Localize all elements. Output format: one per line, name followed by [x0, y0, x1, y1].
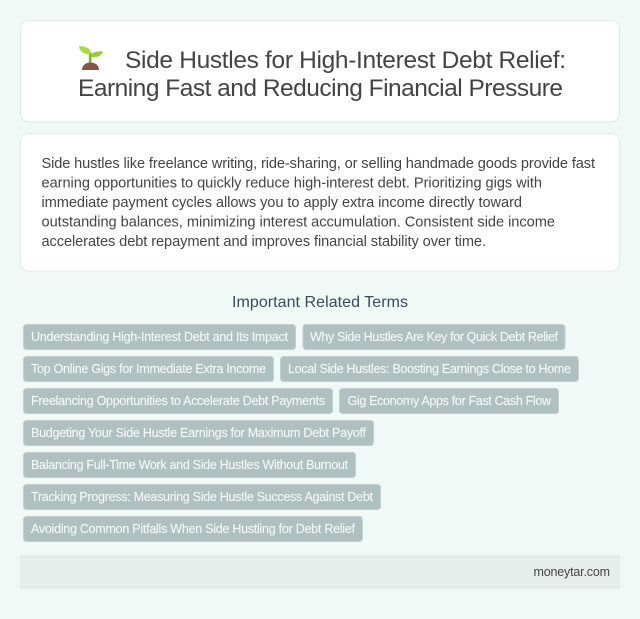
text block: description paragraph: accelerates debt repayment and improves financial stability over time.: [42, 234, 486, 250]
tag: avoiding pitfalls: [24, 516, 362, 542]
tag: tracking progress: Tracking Progress: Measuring Side Hustle Success Against Debt: [31, 490, 374, 504]
footer: source: moneytar.com: [534, 565, 610, 579]
tag: why side hustles: [303, 324, 565, 350]
tag: understanding debt: [24, 324, 296, 350]
tag: balancing: [24, 452, 356, 478]
heading: title: Earning Fast and Reducing Financial Pressure: [78, 75, 563, 102]
tag: budgeting: Budgeting Your Side Hustle Earnings for Maximum Debt Payoff: [31, 426, 367, 440]
tag: understanding debt: Understanding High-Interest Debt and Its Impact: [31, 330, 289, 344]
heading: important related terms: Important Related Terms: [232, 294, 408, 311]
tag: freelancing: [24, 388, 332, 414]
heading: title: Side Hustles for High-Interest Debt Relief:: [125, 47, 566, 74]
tag: online gigs: Top Online Gigs for Immediate Extra Income: [31, 362, 266, 376]
tag: budgeting: [24, 420, 374, 446]
icon: seedling: [79, 46, 103, 70]
text block: description paragraph: [42, 156, 595, 250]
tag list: related terms: [24, 324, 578, 542]
heading: title: [78, 47, 566, 102]
panel: title card: [20, 20, 620, 122]
panel: description: [20, 134, 620, 271]
text block: description paragraph: earning opportunities to quickly reduce high-interest debt. Prioritizing gigs with: [42, 176, 542, 192]
tag: local side hustles: [280, 356, 578, 382]
tag: balancing: Balancing Full-Time Work and Side Hustles Without Burnout: [31, 458, 349, 472]
footer bar: [20, 555, 620, 589]
tag: gig economy apps: [340, 388, 558, 414]
text block: description paragraph: Side hustles like freelance writing, ride-sharing, or selling handmade goods provide fast: [42, 156, 595, 172]
tag: why side hustles: Why Side Hustles Are Key for Quick Debt Relief: [310, 330, 559, 344]
tag: tracking progress: [24, 484, 380, 510]
tag: local side hustles: Local Side Hustles: Boosting Earnings Close to Home: [288, 362, 571, 376]
tag: online gigs: [24, 356, 274, 382]
text block: description paragraph: outstanding balances, minimizing interest accumulation. Consistent side income: [42, 214, 555, 230]
text block: description paragraph: immediate payment cycles allows you to apply extra income directly toward: [42, 195, 522, 211]
tag: gig economy apps: Gig Economy Apps for Fast Cash Flow: [348, 394, 552, 408]
tag: freelancing: Freelancing Opportunities to Accelerate Debt Payments: [31, 394, 325, 408]
tag: avoiding pitfalls: Avoiding Common Pitfalls When Side Hustling for Debt Relief: [31, 522, 356, 536]
